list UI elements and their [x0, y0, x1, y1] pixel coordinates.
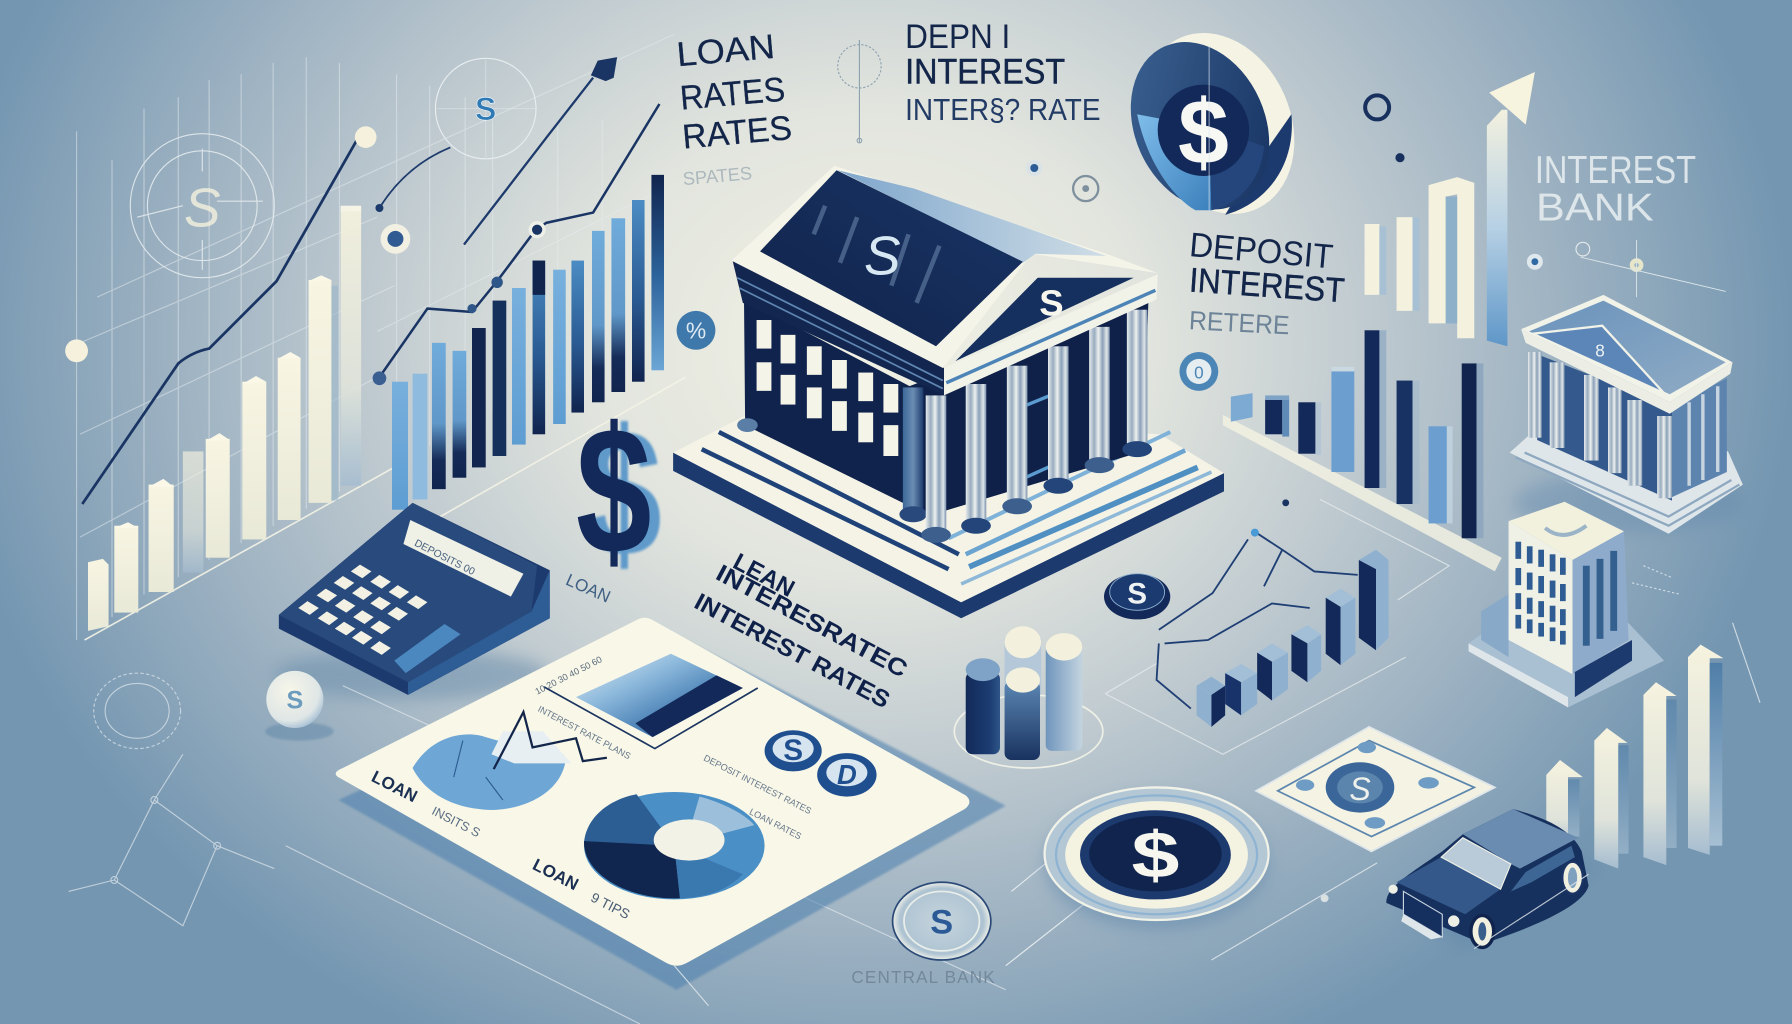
lower bar 4 — [1688, 645, 1723, 855]
icon: outlined S coin left — [130, 134, 274, 278]
bar 3 — [149, 479, 174, 592]
iso bar 4 — [1291, 625, 1321, 682]
heading: deposit interest: DEPOSIT — [1188, 226, 1335, 277]
icon: outlined S coin top — [435, 58, 536, 159]
document right donut — [584, 792, 765, 899]
cream bar c — [1429, 177, 1474, 338]
small bank roof: 8 — [1595, 341, 1605, 361]
bar 2 — [114, 522, 138, 613]
icon: deposit badge: 0 — [1194, 362, 1204, 382]
windshield — [1441, 838, 1511, 889]
right bar 5 — [1365, 330, 1386, 488]
icon: small markers — [1026, 160, 1098, 201]
icon: small ring — [1365, 95, 1405, 162]
icon: car — [1386, 809, 1600, 949]
right cylinder — [1046, 633, 1082, 751]
blue bar 5 — [472, 328, 486, 467]
heading: interest bank: INTEREST — [1535, 149, 1696, 192]
heading: loan rates — [675, 28, 793, 189]
heading: loan rates: RATES — [679, 71, 787, 118]
icon: outlined S coin top: S — [475, 91, 496, 127]
entablature — [733, 261, 1158, 395]
line: middle trend — [373, 104, 659, 385]
icon: large dollar medallion — [1006, 787, 1269, 966]
right bar 7 — [1429, 426, 1453, 523]
icon: silver ball — [265, 671, 334, 741]
document labels: INTEREST RATE PLANS — [536, 704, 632, 761]
panel: blue bar chart — [392, 175, 664, 510]
icon: outlined S coin left: S — [184, 176, 221, 238]
heading: lean interest rates — [690, 548, 912, 714]
icon: S coin navy: S — [1127, 577, 1147, 610]
line: left trend — [65, 126, 377, 504]
bar 9 — [341, 206, 361, 486]
icon: large dollar coin: $ — [1178, 81, 1229, 183]
bar 8 — [309, 275, 338, 503]
bar 7 — [278, 352, 301, 520]
document labels: LOAN RATES — [748, 807, 803, 841]
growth arrow — [1487, 72, 1535, 346]
iso bar 2 — [1225, 664, 1257, 715]
blue bar 2 — [413, 374, 427, 499]
document S coins: S — [783, 734, 803, 767]
document S coins — [765, 730, 877, 797]
blue bar 1 — [392, 382, 408, 510]
document labels: INSITS S — [429, 804, 483, 840]
document area chart — [544, 654, 758, 749]
small bank columns — [1528, 352, 1672, 498]
heading: interest bank: BANK — [1536, 187, 1654, 230]
blue bar 10 — [571, 261, 584, 413]
icon: dollar sign: $ — [576, 389, 651, 592]
tower plinth — [1469, 594, 1664, 707]
roof: S — [864, 224, 901, 286]
chart: small iso bars with network — [1105, 499, 1449, 754]
icon: percent badge: % — [686, 317, 706, 343]
floor lines — [85, 377, 686, 640]
document labels: DEPOSIT INTEREST RATES — [702, 753, 813, 816]
illustration: small bank — [1510, 295, 1743, 534]
lower bar 1 — [1546, 760, 1583, 851]
front cylinder — [1005, 667, 1040, 760]
bar 4 — [183, 451, 203, 573]
calculator screen: DEPOSITS 00 — [412, 538, 477, 578]
illustration: central bank building — [673, 166, 1224, 618]
iso bar 3 — [1257, 643, 1288, 701]
calculator keys — [298, 565, 427, 655]
side window — [1511, 846, 1575, 891]
heading: loan rates: LOAN — [675, 28, 776, 74]
heading: deposit interest rate: INTER§? RATE — [905, 92, 1101, 127]
decor: small floating lines — [674, 566, 1760, 1006]
right bar 8 — [1462, 363, 1483, 538]
right bar 1 — [1231, 393, 1253, 422]
icon: dollar sign: $ — [586, 391, 662, 594]
columns — [921, 310, 1152, 543]
bank left wall — [744, 299, 914, 503]
blue bar 11 — [592, 231, 605, 402]
bar 1 — [88, 559, 109, 631]
icon: deposit badge — [1179, 352, 1218, 391]
heading: loan rates: RATES — [681, 109, 793, 157]
pediment — [955, 278, 1134, 361]
icon: large dollar medallion: $ — [1131, 818, 1179, 892]
back cylinder — [1005, 626, 1041, 695]
icon: banknote: S — [1349, 771, 1371, 807]
calculator screen — [403, 520, 523, 597]
lower bar 3 — [1643, 682, 1677, 865]
cream bar b — [1397, 217, 1419, 311]
right bar 2 — [1265, 395, 1289, 437]
heading: deposit interest rate: INTEREST — [905, 51, 1065, 91]
iso bar 1 — [1197, 677, 1225, 727]
car grille — [1389, 885, 1459, 939]
left corner column — [899, 387, 927, 522]
blue bar 12 — [611, 218, 625, 392]
bar 6 — [242, 376, 266, 539]
icon: silver ball: S — [286, 687, 303, 715]
left cylinder — [966, 658, 1000, 754]
document: report sheet — [336, 618, 1006, 990]
car wheels — [1471, 862, 1583, 947]
small bank base — [1510, 423, 1743, 534]
tower windows right — [1583, 551, 1617, 646]
heading: lean interest rates: INTEREST RATES — [690, 588, 894, 714]
calculator — [274, 503, 550, 699]
chart: right bar chart — [1223, 330, 1502, 571]
decor: left coin outline — [69, 673, 1006, 1024]
chart: lower right bars — [1546, 645, 1723, 869]
icon: banknote — [1256, 727, 1495, 851]
calculator blue button — [394, 624, 461, 673]
right bar 4 — [1331, 367, 1354, 472]
blue bar 4 — [453, 351, 466, 478]
blue bar 3 — [432, 343, 446, 489]
document labels: LOAN — [368, 766, 421, 806]
document S coins: D — [837, 759, 857, 790]
blue bar 6 — [493, 301, 506, 456]
lower bar 2 — [1594, 728, 1629, 869]
tower band — [1469, 640, 1632, 707]
heading: deposit interest: INTEREST — [1188, 262, 1346, 310]
blue bar 14 — [651, 175, 664, 370]
chart grid: upper left — [77, 34, 674, 640]
heading: lean interest rates: INTERESRATEC — [711, 560, 912, 683]
icon: glass S coin — [893, 882, 991, 960]
icon: large dollar coin — [1105, 9, 1322, 238]
heading: interest bank — [1535, 149, 1696, 230]
document labels: 10 20 30 40 50 60 — [534, 654, 604, 697]
label: central bank: CENTRAL BANK — [851, 967, 996, 987]
heading: deposit interest rate — [905, 18, 1101, 127]
document labels: LOAN — [530, 854, 582, 894]
bank hall interior — [903, 297, 1149, 520]
iso bar 6 — [1359, 550, 1389, 650]
cream bar a — [1365, 224, 1386, 295]
blue bar 8 — [533, 261, 545, 434]
chart: upper right cream bars — [1365, 72, 1535, 346]
tower faces — [1509, 502, 1629, 674]
arrow: upper trend — [464, 57, 617, 245]
windows — [757, 320, 898, 456]
icon: small markers right — [1527, 240, 1726, 297]
iso bar 5 — [1326, 589, 1355, 665]
line: short curve — [375, 147, 450, 212]
document left pie — [413, 731, 571, 810]
bar 5 — [206, 433, 230, 558]
heading: lean interest rates: LEAN — [729, 548, 799, 603]
blue bar 9 — [553, 270, 566, 424]
document zigzag line — [494, 712, 607, 769]
icon: pin circle — [838, 40, 881, 143]
illustration: office tower — [1469, 502, 1664, 707]
tower windows left — [1515, 542, 1566, 645]
tower roof mark — [1545, 526, 1586, 535]
small bank roof — [1521, 295, 1733, 414]
document labels: 9 TIPS — [588, 890, 632, 922]
heading: deposit interest: RETERE — [1188, 305, 1290, 340]
heading: deposit interest rate: DEPN I — [905, 18, 1010, 56]
icon: dot marker — [381, 224, 410, 254]
heading: loan rates: SPATES — [682, 162, 753, 189]
car hood — [1397, 857, 1501, 914]
small bank walls — [1537, 354, 1727, 501]
heading: deposit interest — [1188, 226, 1346, 340]
icon: S coin navy — [1104, 574, 1170, 619]
pediment: S — [1039, 282, 1064, 323]
icon: percent badge — [677, 311, 715, 350]
chart: cylinders — [954, 626, 1103, 768]
right bar 6 — [1397, 381, 1419, 504]
icon: glass S coin: S — [930, 904, 953, 942]
right bar 3 — [1298, 402, 1321, 455]
panel: cream bar chart — [88, 206, 361, 631]
plinth of left wall — [737, 418, 758, 432]
car body — [1386, 809, 1589, 943]
blue bar 13 — [632, 200, 645, 382]
roof — [731, 166, 1158, 368]
car roof — [1463, 809, 1578, 869]
document labels — [368, 654, 813, 922]
blue bar 7 — [512, 288, 526, 445]
bank base — [673, 414, 1224, 618]
label: loan: LOAN — [563, 569, 614, 607]
